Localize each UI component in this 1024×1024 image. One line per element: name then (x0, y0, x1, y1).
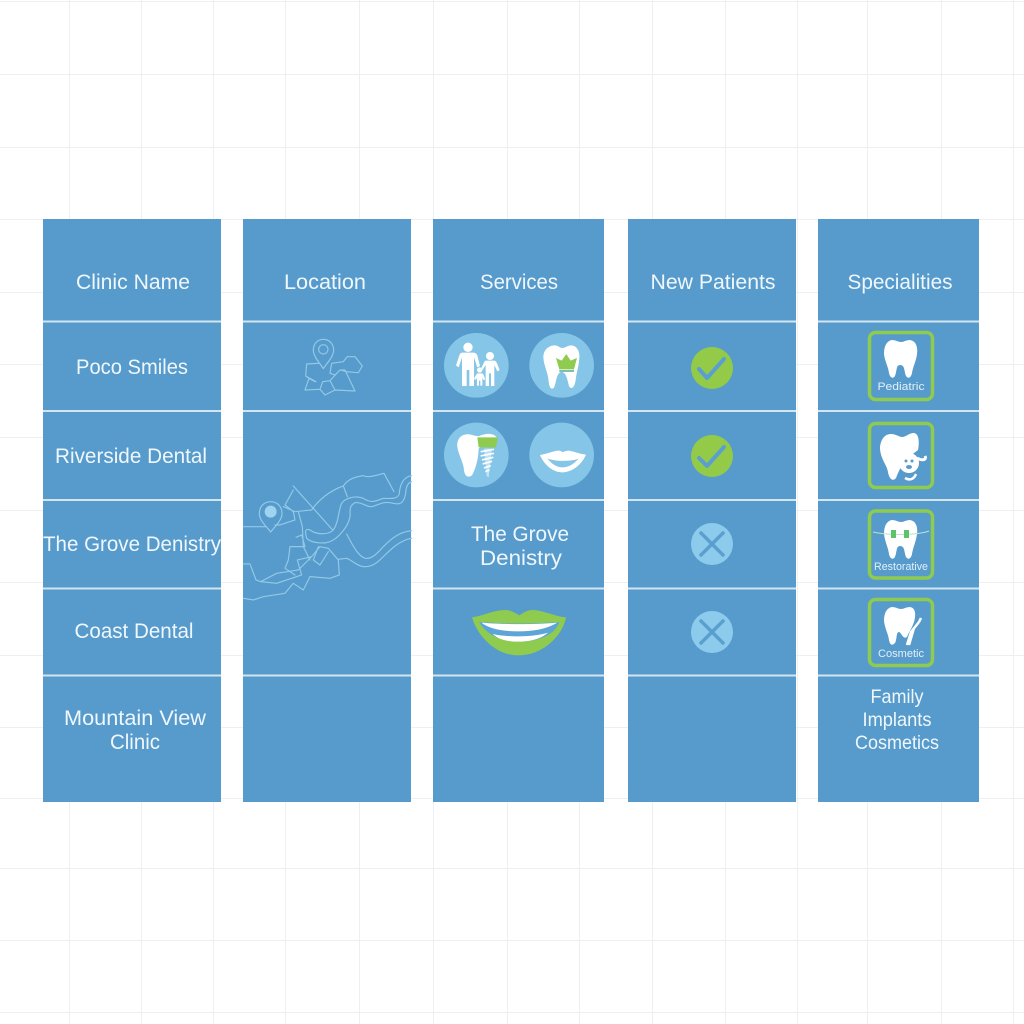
text: Mountain View Clinic: Clinic (110, 731, 160, 754)
icon: cross (691, 523, 733, 565)
panel: new patients column (628, 219, 796, 802)
text: The Grove Denistry: Denistry (480, 547, 563, 570)
icon: check (691, 435, 733, 477)
text: Riverside Dental: Riverside Dental (55, 445, 207, 468)
panel: clinic name column (43, 219, 221, 802)
text: The Grove Denistry: The Grove (471, 523, 569, 546)
label: Restorative: Restorative (874, 561, 928, 573)
text: Poco Smiles: Poco Smiles (76, 356, 188, 379)
text: family implants cosmetics: Family (870, 686, 924, 708)
panel: location column (243, 219, 412, 802)
icon: smile (529, 423, 594, 487)
heading: location: Location (284, 271, 366, 294)
icon: cosmetic tooth badge (870, 600, 932, 666)
icon: pediatric tooth badge (870, 332, 932, 400)
text: The Grove Denistry (471, 523, 569, 570)
text: Mountain View Clinic: Mountain View (64, 707, 207, 730)
icon: family (444, 333, 509, 398)
icon: small map with pin (305, 339, 362, 395)
icon: large city map with pin and river (243, 473, 412, 600)
text: Mountain View Clinic (64, 707, 207, 754)
icon: tooth with face badge (870, 424, 932, 488)
panel: specialities column (818, 219, 979, 802)
text: The Grove Denistry: The Grove Denistry (43, 533, 221, 556)
icon: cross (691, 611, 733, 653)
heading: services: Services (480, 271, 558, 294)
label: Pediatric: Pediatric (878, 381, 925, 393)
icon: tooth with implant (444, 423, 509, 487)
heading: clinic name: Clinic Name (76, 271, 190, 294)
icon: tooth with crown (529, 333, 594, 398)
text: family implants cosmetics: Cosmetics (855, 732, 939, 754)
label: Cosmetic: Cosmetic (878, 648, 925, 660)
icon: check (691, 347, 733, 389)
icon: green lips smile (472, 610, 566, 655)
text: family implants cosmetics (855, 686, 939, 754)
panel: services column (433, 219, 604, 802)
icon: tooth with braces badge (870, 511, 932, 578)
heading: specialities: Specialities (848, 271, 952, 294)
text: Coast Dental: Coast Dental (74, 620, 194, 643)
text: family implants cosmetics: Implants (862, 709, 932, 731)
heading: new patients: New Patients (650, 271, 776, 294)
